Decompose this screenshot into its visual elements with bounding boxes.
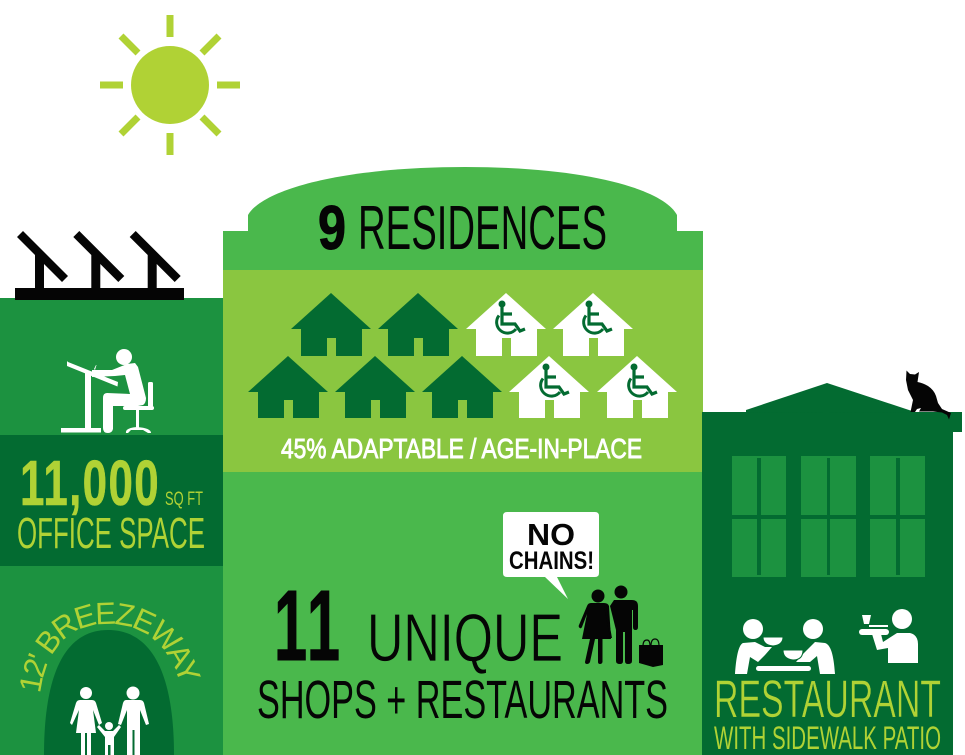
icon: shoppers with bag	[579, 586, 663, 667]
panel: center building	[223, 167, 703, 755]
callout: no chains: CHAINS!	[509, 547, 594, 575]
text: 12' breezeway: 12' BREEZEWAY	[20, 602, 201, 692]
icon: diners at table	[735, 619, 835, 674]
heading: 11,000 sq ft office space: SQ FT	[165, 489, 203, 510]
panel: left office building	[0, 298, 223, 755]
windows	[732, 456, 925, 577]
callout: no chains	[503, 512, 599, 599]
heading: 11,000 sq ft office space	[17, 447, 205, 558]
icon: family	[70, 686, 149, 755]
heading: 11,000 sq ft office space: OFFICE SPACE	[17, 509, 205, 558]
heading: 11 unique shops + restaurants	[257, 570, 668, 730]
icon: person at drafting table	[61, 349, 154, 433]
icons: accessible houses	[466, 293, 677, 418]
heading: 11 unique shops + restaurants: 11	[274, 570, 343, 682]
icon: waiter with tray	[859, 609, 918, 663]
panel: breezeway arch	[44, 630, 174, 755]
heading: 11 unique shops + restaurants: SHOPS + RESTAURANTS	[257, 670, 668, 730]
icon: cat	[906, 370, 951, 420]
heading: 11,000 sq ft office space: 11,000	[20, 447, 160, 519]
callout: no chains: NO	[527, 517, 575, 552]
heading: 11 unique shops + restaurants: UNIQUE	[367, 600, 563, 676]
panel: right restaurant building	[702, 383, 962, 755]
heading: 9 residences: 9	[318, 194, 346, 263]
heading: 9 residences: RESIDENCES	[358, 194, 607, 263]
heading: restaurant with sidewalk patio	[714, 670, 941, 755]
text: 45% adaptable: 45% ADAPTABLE / AGE-IN-PLACE	[281, 433, 642, 464]
icons: standard houses	[248, 293, 502, 418]
icon: sun	[100, 15, 240, 155]
icon: solar panels	[15, 231, 184, 300]
heading: 9 residences	[318, 194, 607, 263]
